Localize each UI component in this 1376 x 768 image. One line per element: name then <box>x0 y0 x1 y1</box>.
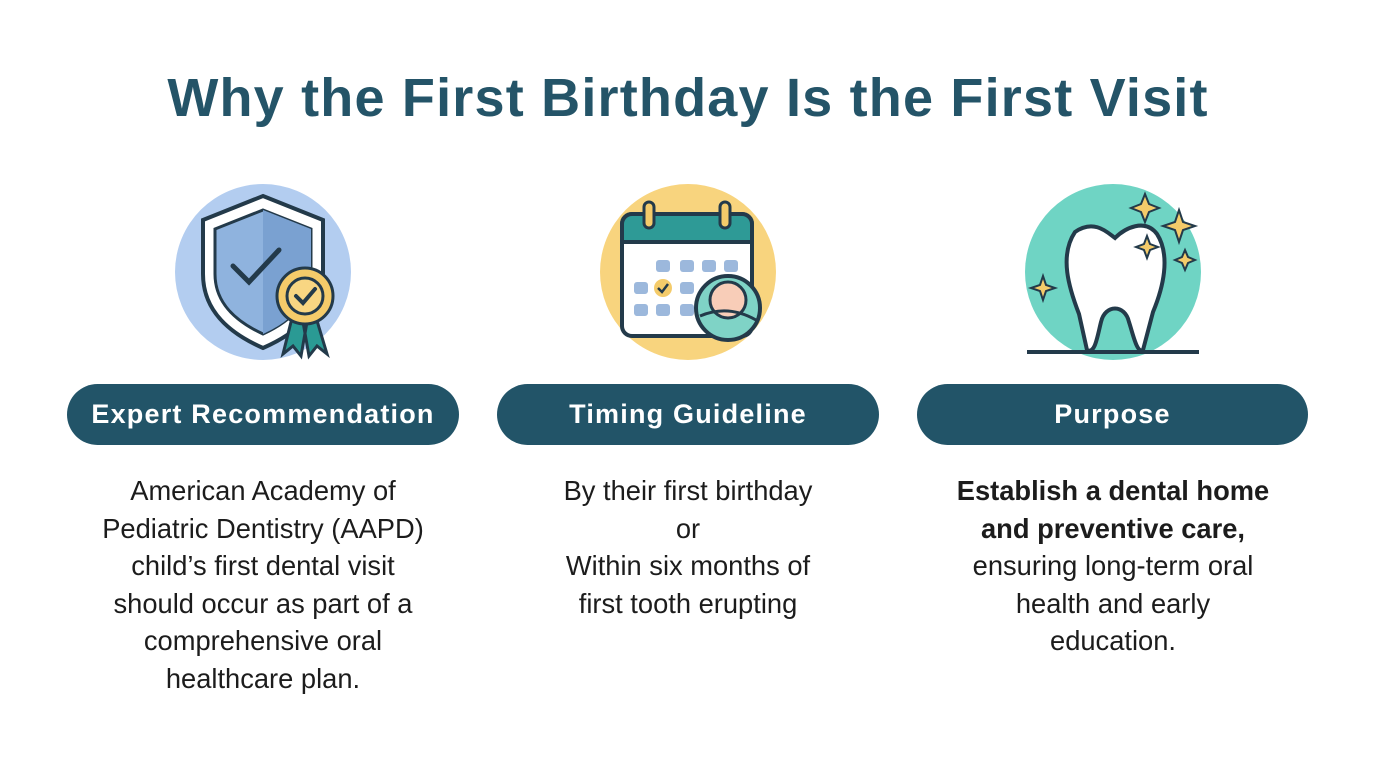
pill: timing guideline: Timing Guideline <box>569 399 807 429</box>
icon: tooth with sparkles <box>1025 184 1201 360</box>
text: timing guideline: first tooth erupting <box>579 588 797 618</box>
text: expert recommendation: should occur as part of a <box>114 588 412 618</box>
icon: shield with badge <box>175 184 351 360</box>
text: expert recommendation <box>102 475 424 694</box>
text: purpose: health and early <box>1016 588 1210 618</box>
text: expert recommendation: American Academy of <box>130 475 396 506</box>
pill: expert recommendation <box>67 384 459 445</box>
text: purpose: Establish a dental home <box>957 475 1269 506</box>
pill: purpose: Purpose <box>1054 399 1171 429</box>
text: timing guideline: or <box>676 512 700 544</box>
title: Why the First Birthday Is the First Visit <box>167 68 1209 128</box>
pill: purpose <box>917 384 1308 445</box>
text: timing guideline: Within six months of <box>566 550 810 581</box>
text: expert recommendation: child’s first dental visit <box>131 550 395 581</box>
text: purpose: and preventive care, <box>981 512 1245 544</box>
text: expert recommendation: healthcare plan. <box>166 662 360 694</box>
text: timing guideline <box>564 475 812 619</box>
text: expert recommendation: Pediatric Dentistry (AAPD) <box>102 512 424 544</box>
text: timing guideline: By their first birthday <box>564 475 812 506</box>
text: purpose <box>957 475 1269 656</box>
text: purpose: education. <box>1050 625 1176 656</box>
text: purpose: ensuring long-term oral <box>973 550 1253 581</box>
pill: expert recommendation: Expert Recommendation <box>91 399 435 429</box>
icon: calendar with baby <box>600 184 776 360</box>
pill: timing guideline <box>497 384 879 445</box>
text: expert recommendation: comprehensive oral <box>144 625 382 656</box>
